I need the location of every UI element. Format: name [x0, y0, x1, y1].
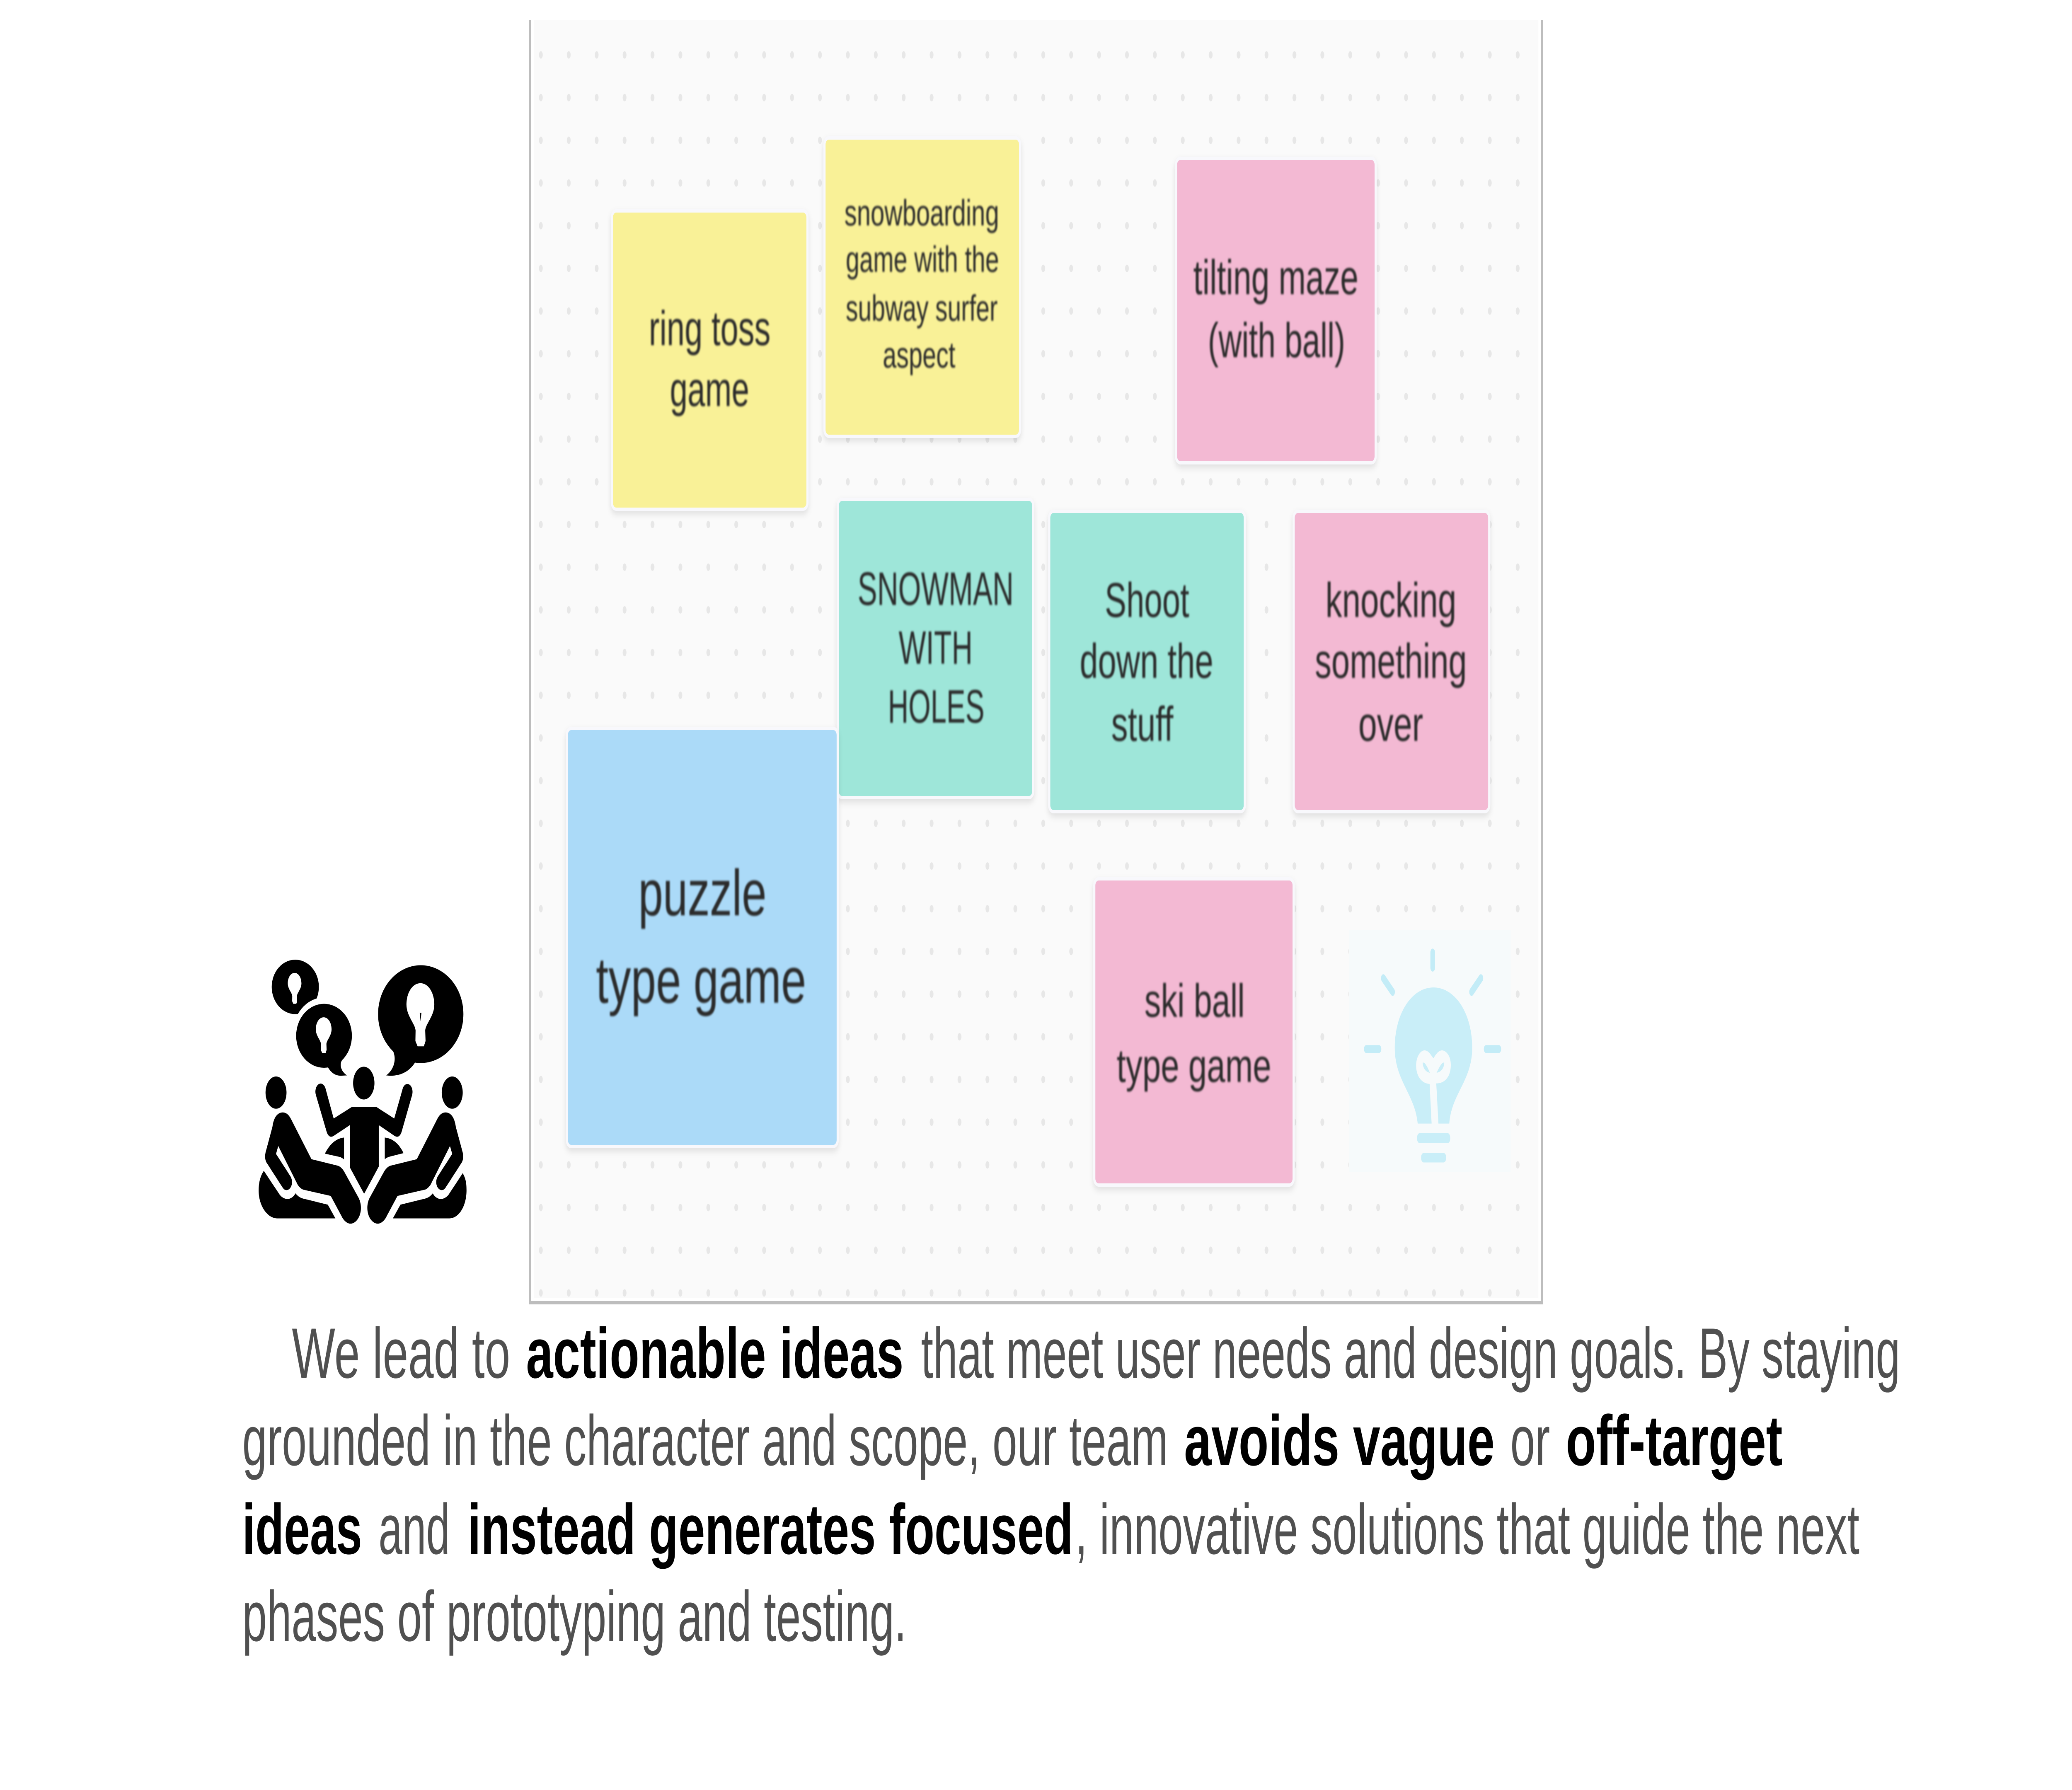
- person: left: [259, 1076, 361, 1224]
- text block: description paragraph: off-target: [1566, 1401, 1782, 1480]
- sticky note: puzzle type game: type game: [596, 944, 806, 1017]
- sticky note: snowboarding game: snowboarding: [845, 193, 999, 233]
- sticky note: snowman with holes: WITH: [899, 622, 973, 674]
- text block: description paragraph: phases of prototyping and testing.: [242, 1577, 906, 1656]
- sticky note: ring toss game: [612, 211, 808, 509]
- sticky note: snowboarding game: aspect: [883, 335, 956, 375]
- sticky note: puzzle type game: [567, 728, 838, 1147]
- sticky note: ski ball type game: [1094, 879, 1294, 1185]
- sticky note: ski ball type game: type game: [1117, 1040, 1271, 1092]
- sticky note: snowman with holes: HOLES: [888, 681, 985, 733]
- speech bubble: top left: [272, 960, 356, 1074]
- text block: description paragraph: that meet user needs and design goals. By staying: [921, 1313, 1900, 1393]
- text block: description paragraph: grounded in the character and scope, our team: [242, 1401, 1168, 1480]
- sticky note: shoot down the stuff: down the: [1080, 634, 1213, 689]
- icon: pale light bulb: [1349, 930, 1511, 1172]
- text block: description paragraph: [242, 1313, 1900, 1656]
- sticky note: shoot down the stuff: stuff: [1111, 697, 1174, 752]
- icon: three people brainstorming with light-bulb speech bubbles: [259, 960, 467, 1224]
- text block: description paragraph: We lead to: [292, 1313, 510, 1393]
- speech bubble: large right: [378, 965, 463, 1076]
- text block: description paragraph: and: [378, 1490, 450, 1569]
- sticky note: snowboarding game: game with the: [846, 239, 999, 280]
- sticky note: knocking something over: something: [1315, 634, 1467, 689]
- panel: sticky-note brainstorm board: [530, 20, 1542, 1303]
- sticky note: tilting maze: [1176, 158, 1376, 463]
- sticky note: ski ball type game: ski ball: [1145, 975, 1245, 1027]
- sticky note: knocking something over: knocking: [1326, 573, 1456, 628]
- sticky note: snowboarding game: subway surfer: [846, 288, 998, 329]
- sticky note: shoot down the stuff: [1049, 511, 1245, 812]
- text block: description paragraph: ideas: [242, 1490, 362, 1569]
- sticky note: ring toss game: ring toss: [649, 302, 770, 356]
- text block: description paragraph: , innovative solutions that guide the next: [1075, 1490, 1859, 1569]
- sticky note: snowman with holes: SNOWMAN: [858, 563, 1014, 615]
- sticky note: tilting maze: (with ball): [1208, 314, 1345, 368]
- text block: description paragraph: or: [1510, 1401, 1550, 1480]
- text block: description paragraph: actionable ideas: [526, 1313, 903, 1393]
- sticky note: knocking something over: over: [1358, 697, 1423, 752]
- sticky note: knocking something over: [1294, 511, 1489, 812]
- sticky note: snowman with holes: [838, 499, 1033, 798]
- sticky note: ring toss game: game: [670, 363, 749, 417]
- text block: description paragraph: instead generates focused: [467, 1490, 1073, 1569]
- sticky note: puzzle type game: puzzle: [638, 857, 767, 929]
- person: centre: [315, 1067, 413, 1194]
- sticky note: tilting maze: tilting maze: [1193, 251, 1358, 305]
- sticky note: shoot down the stuff: Shoot: [1105, 573, 1189, 628]
- speech bubble: middle: [296, 1004, 352, 1076]
- text block: description paragraph: avoids vague: [1184, 1401, 1495, 1480]
- person: right: [367, 1076, 467, 1224]
- sticky note: snowboarding game: [825, 138, 1020, 436]
